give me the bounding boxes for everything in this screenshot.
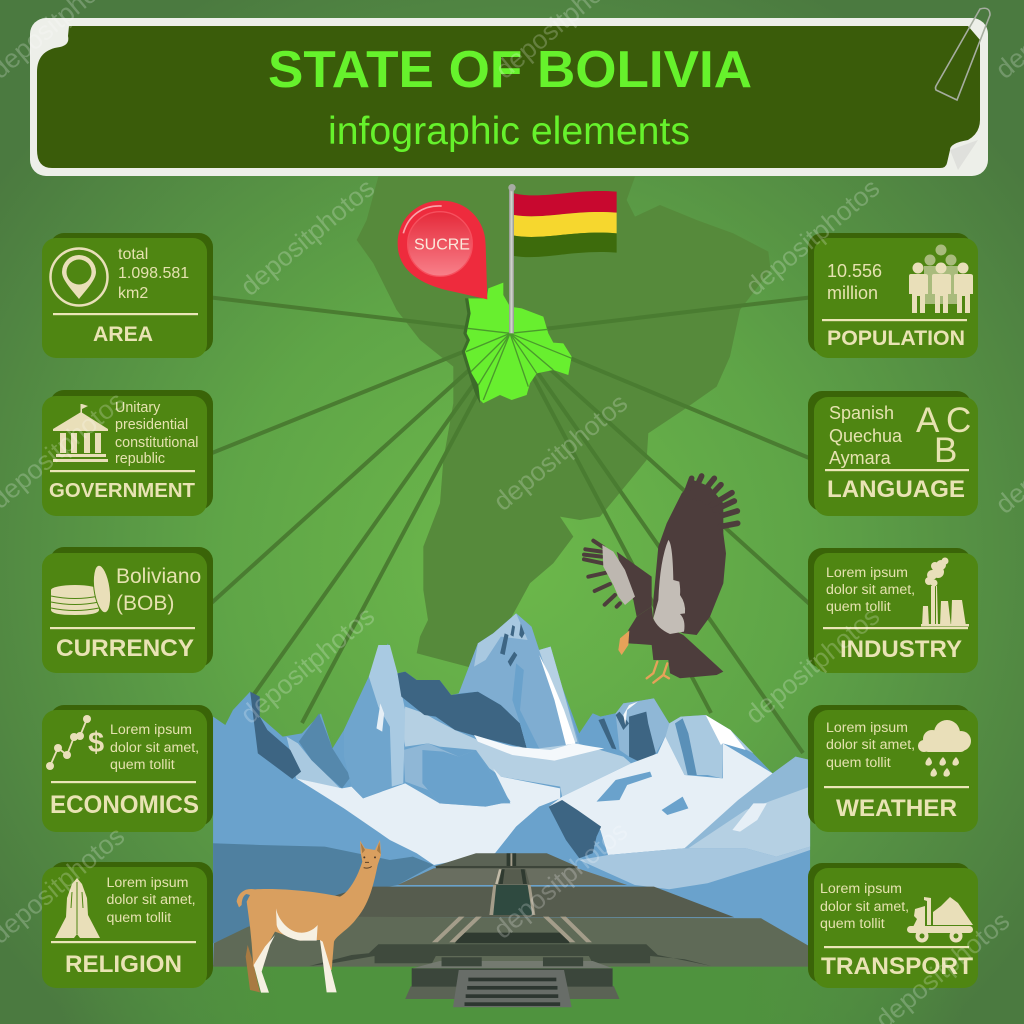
guanaco — [237, 840, 381, 993]
panel: industry — [808, 548, 978, 673]
transport text: quem tollit — [820, 916, 885, 932]
currency text: Boliviano — [116, 565, 201, 588]
weather label: WEATHER — [836, 795, 957, 822]
transport label: TRANSPORT — [821, 953, 973, 980]
ground — [60, 960, 964, 1024]
map: Bolivia highlighted — [462, 283, 572, 403]
panel: religion — [42, 862, 213, 988]
icon: growth chart with dollar: $ — [88, 727, 104, 759]
language list: Spanish — [829, 403, 894, 423]
icon: letters A C B: C — [946, 401, 971, 440]
icon: government building — [53, 404, 108, 462]
icon: factory — [921, 558, 969, 626]
pyramid temple — [213, 853, 810, 1007]
area text: 1.098.581 — [118, 265, 189, 282]
population text: 10.556 — [827, 261, 882, 281]
icon: letters A C B: A — [916, 401, 940, 440]
population text: million — [827, 283, 878, 303]
panel: government — [42, 390, 213, 516]
icon: letters A C B: B — [934, 431, 957, 470]
icon: paper clip — [936, 8, 990, 100]
industry text: Lorem ipsum — [826, 565, 908, 581]
icon: dump truck — [907, 897, 973, 942]
banner — [30, 18, 988, 176]
icon: praying hands — [55, 878, 100, 938]
area text: km2 — [118, 285, 148, 302]
transport text: dolor sit amet, — [820, 899, 909, 915]
watermarks: depositphotos — [740, 173, 885, 302]
icon: location pin — [50, 248, 108, 306]
area text: total — [118, 246, 148, 263]
watermarks: depositphotos — [488, 388, 633, 517]
currency label: CURRENCY — [56, 635, 194, 662]
icon: people — [909, 244, 973, 313]
industry text: dolor sit amet, — [826, 582, 915, 598]
panel: transport — [808, 863, 978, 988]
language list: Quechua — [829, 426, 903, 446]
icon: coins — [51, 564, 113, 615]
area label: AREA — [93, 323, 153, 346]
economics text: Lorem ipsum — [110, 722, 192, 738]
language label: LANGUAGE — [827, 476, 965, 503]
rays to panels — [207, 297, 814, 753]
government text: presidential — [115, 417, 188, 433]
title: STATE OF BOLIVIA — [268, 41, 752, 99]
map: South America — [357, 177, 771, 670]
map pin: Sucre — [398, 201, 487, 299]
weather text: dolor sit amet, — [826, 737, 915, 753]
religion label: RELIGION — [65, 951, 182, 978]
map pin: Sucre: SUCRE — [414, 236, 470, 253]
panel: economics — [42, 705, 213, 832]
mountain landscape — [213, 613, 810, 965]
government text: Unitary — [115, 400, 161, 416]
flag of Bolivia — [508, 184, 617, 333]
government label: GOVERNMENT — [49, 479, 195, 502]
government text: constitutional — [115, 435, 198, 451]
watermarks: depositphotos — [740, 601, 885, 730]
economics text: quem tollit — [110, 757, 175, 773]
panel: language — [808, 391, 978, 516]
religion text: dolor sit amet, — [106, 892, 196, 908]
industry label: INDUSTRY — [840, 636, 962, 663]
watermarks: depositphotos — [488, 816, 633, 945]
economics label: ECONOMICS — [50, 791, 199, 819]
subtitle: infographic elements — [328, 110, 690, 153]
weather text: Lorem ipsum — [826, 720, 908, 736]
religion text: quem tollit — [106, 910, 171, 926]
weather text: quem tollit — [826, 755, 891, 771]
watermarks: depositphotos — [235, 601, 380, 730]
icon: growth chart with dollar — [46, 715, 104, 770]
panel: population — [808, 233, 978, 358]
religion text: Lorem ipsum — [106, 875, 189, 891]
condor — [584, 476, 738, 683]
panel: area — [42, 233, 213, 358]
currency text: (BOB) — [116, 592, 174, 615]
panel: weather — [808, 705, 978, 832]
language list: Aymara — [829, 448, 892, 468]
panel: currency — [42, 547, 213, 673]
watermarks: depositphotos — [235, 173, 380, 302]
economics text: dolor sit amet, — [110, 740, 199, 756]
industry text: quem tollit — [826, 599, 891, 615]
population label: POPULATION — [827, 327, 965, 350]
government text: republic — [115, 451, 165, 467]
icon: rain cloud — [918, 720, 971, 777]
transport text: Lorem ipsum — [820, 881, 902, 897]
